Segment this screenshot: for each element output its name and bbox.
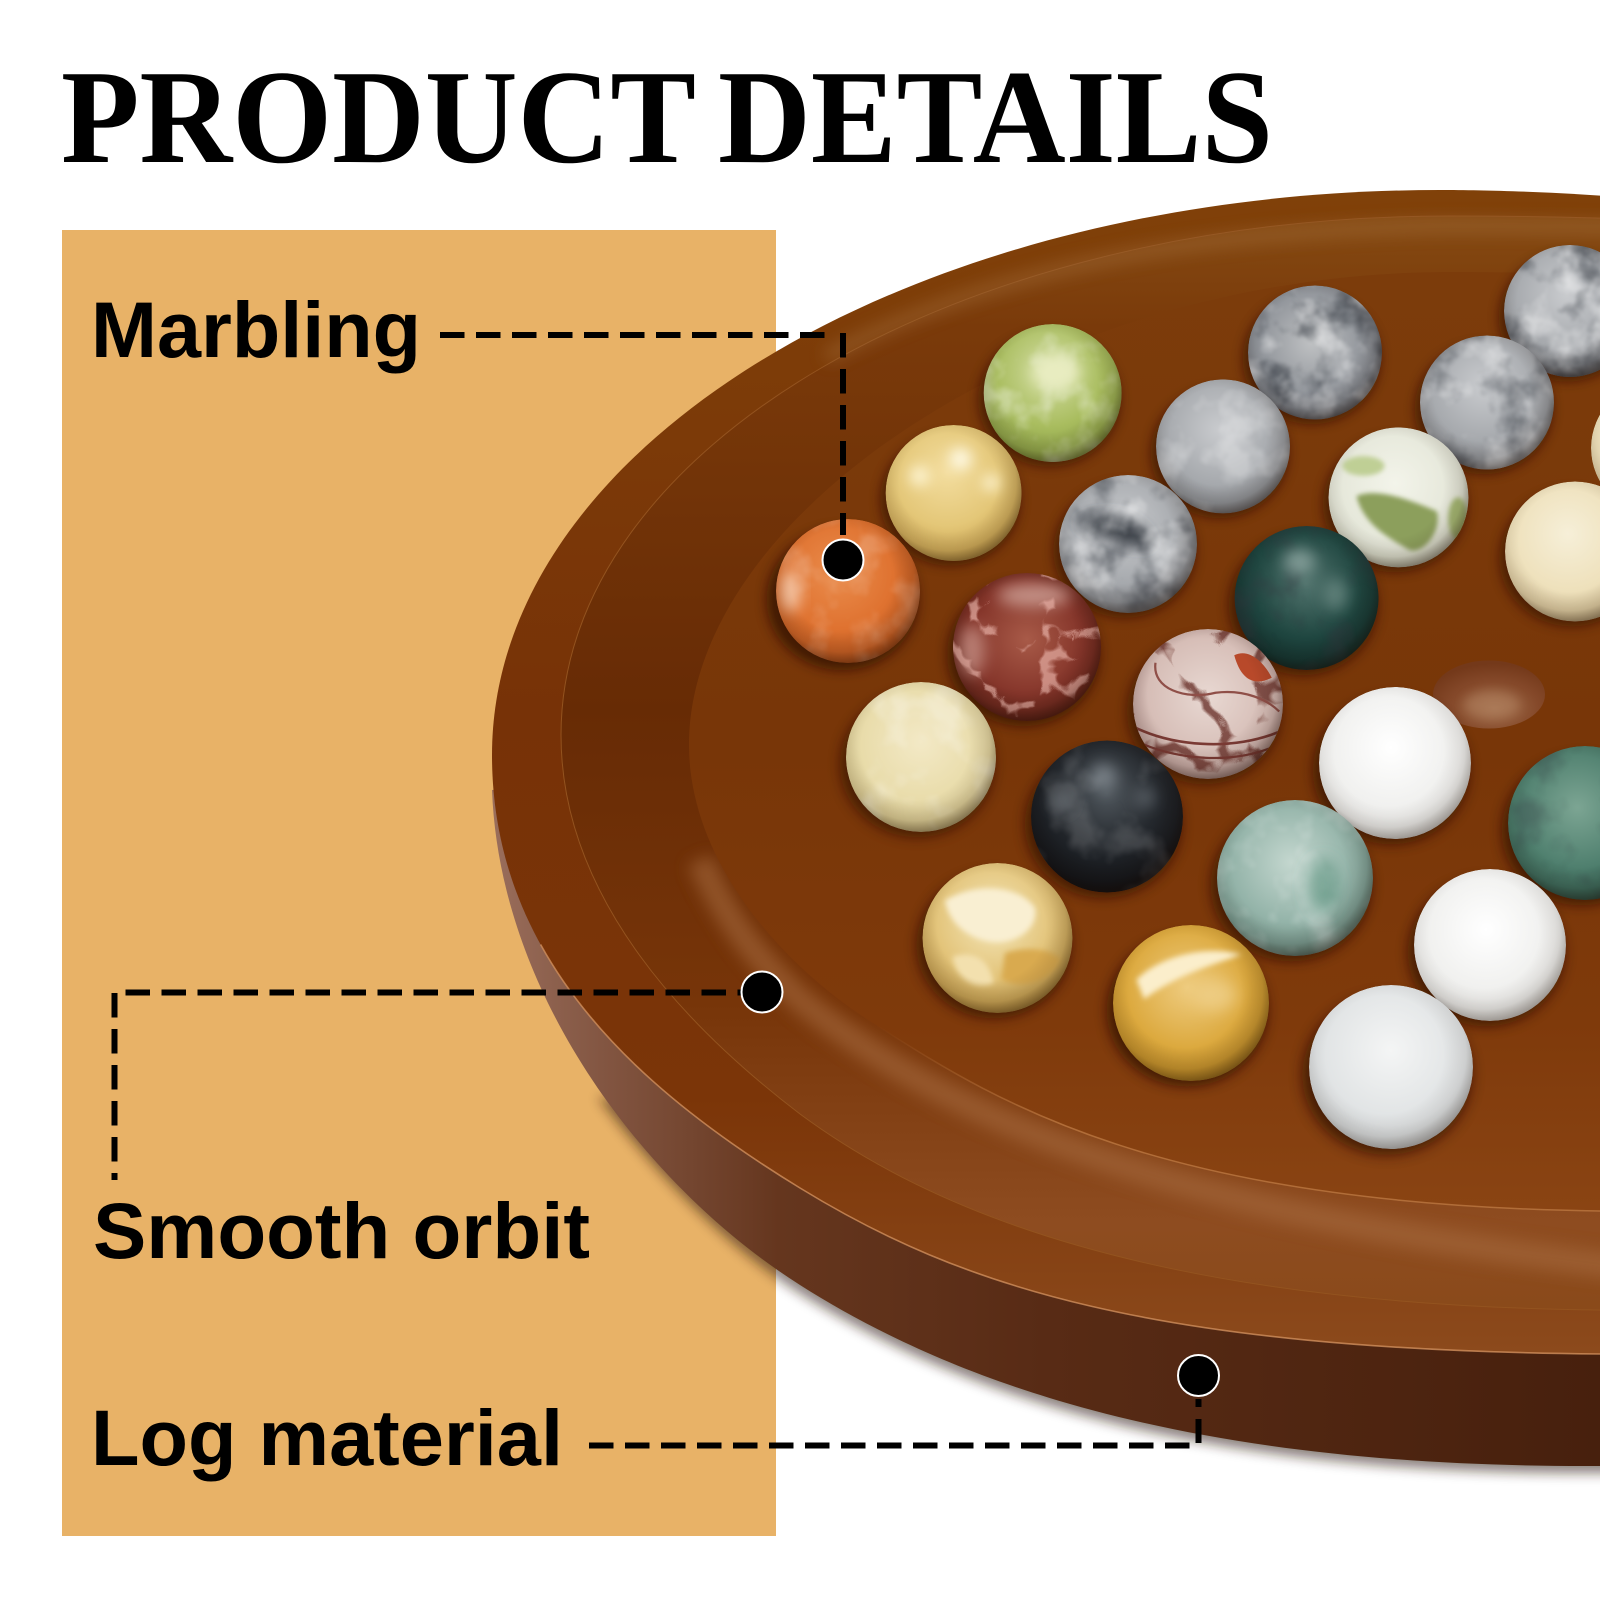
board floor <box>689 272 1600 1212</box>
board shadow <box>598 1097 1600 1473</box>
callout: Marbling <box>91 285 864 580</box>
title: PRODUCT <box>61 43 696 191</box>
marble: black <box>1023 733 1191 900</box>
board side wall <box>492 780 1600 1466</box>
empty marble hole <box>1433 660 1545 728</box>
marble: orange <box>767 512 927 670</box>
callout: Log material: Log material <box>91 1393 563 1482</box>
marble: dark grey <box>1241 279 1389 426</box>
title: DETAILS <box>718 43 1273 191</box>
marble: pink veined <box>1126 622 1290 786</box>
marble: dark jade right <box>1500 738 1600 908</box>
marble: cream right <box>1499 482 1600 626</box>
callout: Smooth orbit <box>93 972 782 1275</box>
marble: grey and black <box>1052 468 1204 620</box>
marble: white <box>1313 687 1471 844</box>
groove highlight top <box>826 226 1600 357</box>
rim edge highlight <box>541 944 1600 1354</box>
callout: Log material <box>91 1355 1219 1482</box>
groove highlight bottom <box>700 860 1600 1275</box>
marble: white-grey front <box>1302 985 1473 1155</box>
marble: white lower <box>1408 869 1566 1026</box>
marble: yellow <box>880 425 1022 566</box>
marble: grey top right <box>1497 238 1600 384</box>
board top rim <box>492 190 1600 1354</box>
panel: tan background <box>62 230 776 1536</box>
marble: jade <box>1209 792 1381 964</box>
marble: red veined <box>946 566 1108 728</box>
marble: lime green <box>977 317 1129 469</box>
floor edge highlight <box>876 1025 1600 1212</box>
marble: gold <box>1107 925 1269 1086</box>
solitaire board <box>492 190 1600 1473</box>
marble: yellow bubbled <box>916 863 1072 1018</box>
marble: dark green <box>1227 519 1386 677</box>
title <box>61 43 1273 191</box>
callout: Marbling: Marbling <box>91 285 421 374</box>
groove ring <box>561 216 1600 1310</box>
marble: partial far right <box>1591 414 1600 482</box>
callout: Smooth orbit: Smooth orbit <box>93 1186 590 1275</box>
marble: grey <box>1413 329 1561 476</box>
marble: green and white <box>1323 427 1468 572</box>
marble: cream yellow <box>838 674 1004 840</box>
marble: light grey <box>1149 373 1297 520</box>
